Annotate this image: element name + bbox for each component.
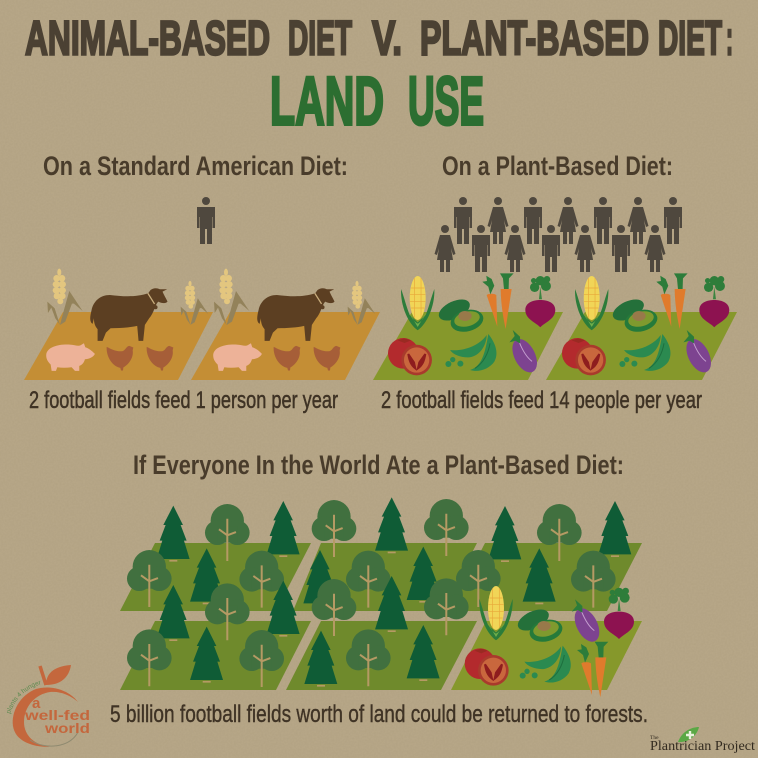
panel: animal-based fields [24,269,380,380]
heading: everyone plant-based: If Everyone In the World Ate a Plant-Based Diet: [133,450,624,480]
icon: vegetables in forest field [465,586,634,697]
logo: the plantrician project: Plantrician Project [650,739,755,754]
panel: forest fields [120,497,642,697]
heading: plant-based diet: On a Plant-Based Diet: [442,151,673,181]
trees [127,497,631,687]
logo: the plantrician project: The [650,735,659,741]
title: PLANT-BASED [420,12,649,66]
logo: a well-fed world: well-fed [24,707,90,723]
title [25,12,733,66]
field 1 [24,312,213,380]
caption: animal-based: 2 football fields feed 1 person per year [29,387,338,414]
logo: a well-fed world [7,665,90,747]
heading: land use: USE [408,62,484,140]
icon: vegetables field 2 [562,273,729,376]
icon: vegetables field 1 [388,273,555,376]
icon: cows [90,288,335,341]
text: : [726,12,733,66]
logo: the plantrician project [650,727,755,754]
field grid [120,543,642,690]
icon: chickens [107,346,340,370]
icon: wheat set [47,269,375,325]
title: ANIMAL-BASED [25,12,270,66]
icon group: fourteen people [434,197,682,272]
heading: land use: LAND [270,62,384,140]
field 2 [191,312,380,380]
icon: pigs [46,343,262,371]
logo: a well-fed world: a [32,695,41,712]
field 1 [373,312,563,380]
logo: a well-fed world: plants 4 hunger [7,680,40,714]
heading: standard american diet: On a Standard American Diet: [43,151,348,181]
title: V. [372,12,402,66]
field 2 [546,312,737,380]
icon: one person [197,197,215,244]
title: DIET [288,12,352,66]
panel: plant-based fields [373,273,737,380]
logo: a well-fed world: world [44,720,90,736]
